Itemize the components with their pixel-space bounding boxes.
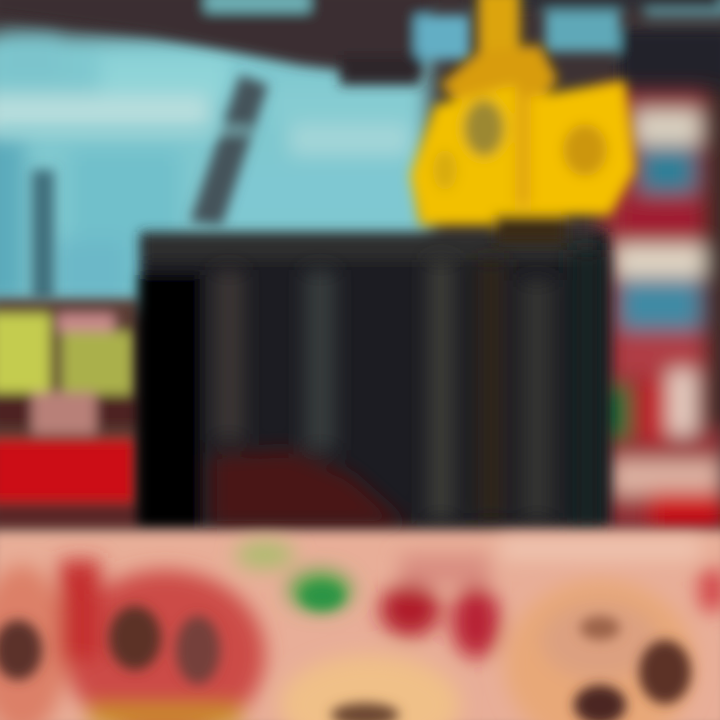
background: glass roof xyxy=(0,30,430,310)
right column: colourful stalls xyxy=(600,90,720,530)
left stall: green and red xyxy=(0,300,140,530)
dark central block xyxy=(138,232,608,528)
block column detail xyxy=(210,250,604,530)
yellow hanging ornament xyxy=(410,0,635,243)
pastry centres xyxy=(0,582,691,720)
foreground: pastries xyxy=(0,530,720,720)
roof beams xyxy=(0,0,720,300)
